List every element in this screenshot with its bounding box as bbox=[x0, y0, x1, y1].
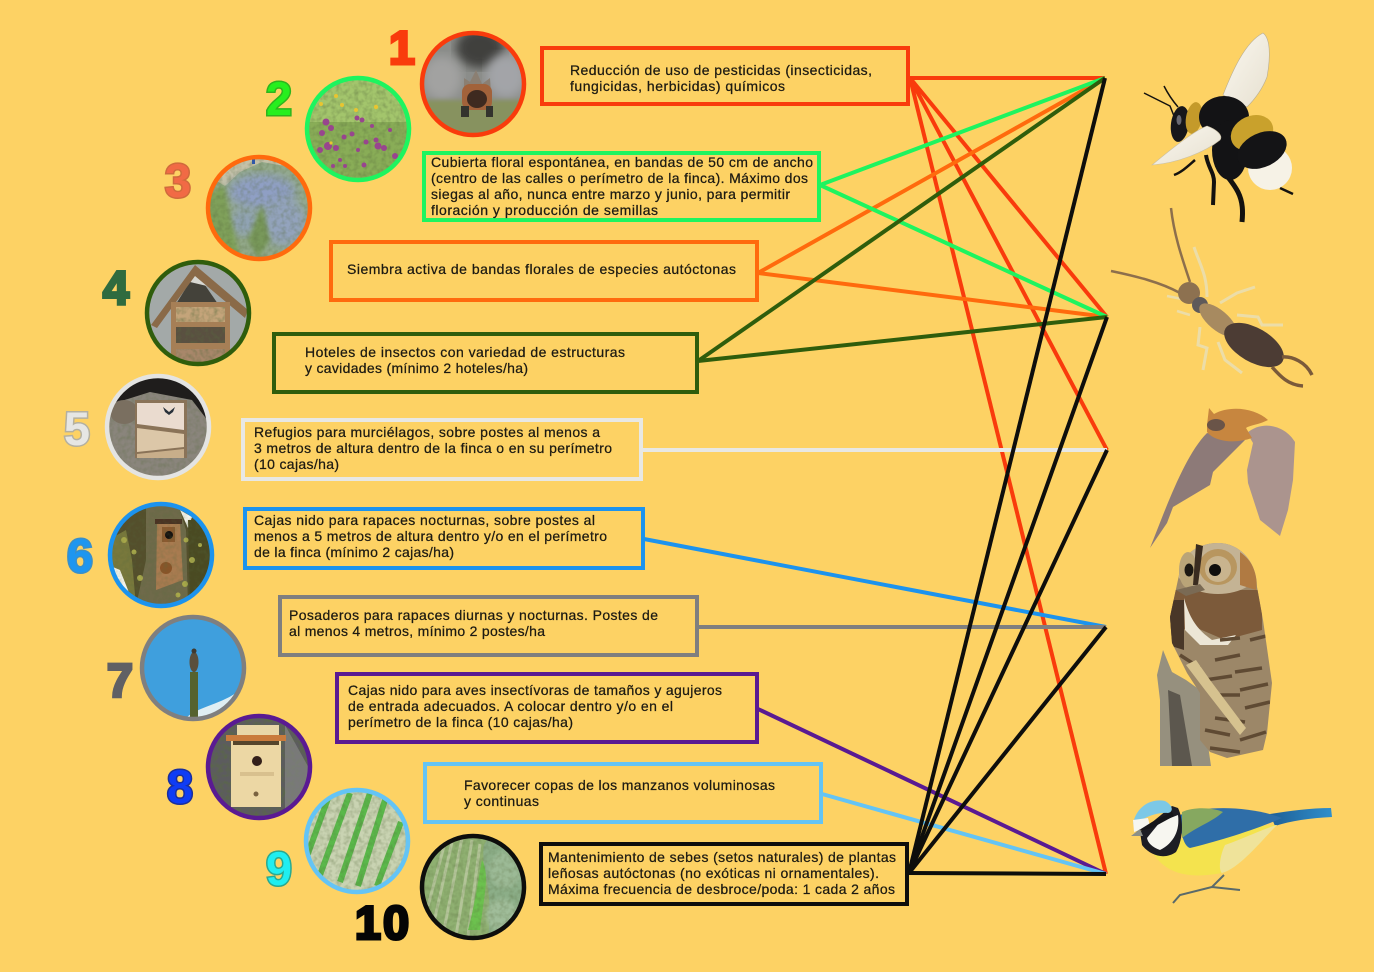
number 1: 1 bbox=[389, 21, 415, 74]
number 3: 3 bbox=[165, 154, 191, 207]
measure 2 text box: floración y producción de semillas bbox=[431, 202, 658, 218]
connectors: measure 2 bbox=[820, 78, 1107, 317]
number 10: 10 bbox=[355, 896, 411, 949]
measure 6 text box bbox=[245, 509, 643, 568]
connector: measure 9 bbox=[822, 794, 1106, 874]
measure 10: photo of hedges bbox=[420, 834, 526, 940]
measure 4 text box bbox=[274, 334, 697, 392]
number 6: 6 bbox=[67, 529, 93, 582]
measure 6: photo of owl nest box bbox=[108, 502, 214, 608]
measure 5 text box: Refugios para murciélagos, sobre postes al menos a bbox=[254, 424, 600, 440]
ring 5 bbox=[107, 376, 209, 478]
measure 2: photo of flower cover bbox=[305, 76, 411, 182]
measure 5 text box: 3 metros de altura dentro de la finca o en su perímetro bbox=[254, 440, 612, 456]
measure 7 text box: al menos 4 metros, mínimo 2 postes/ha bbox=[289, 623, 545, 639]
ring 2 bbox=[307, 78, 409, 180]
connector: measure 7 bbox=[698, 625, 1106, 629]
ring 8 bbox=[208, 716, 310, 818]
number 5: 5 bbox=[64, 402, 90, 455]
measure 4 text box: y cavidades (mínimo 2 hoteles/ha) bbox=[305, 360, 528, 376]
ring 3 bbox=[208, 157, 310, 259]
measure 10 text box: Máxima frecuencia de desbroce/poda: 1 cada 2 años bbox=[548, 881, 895, 897]
ring 6 bbox=[110, 504, 212, 606]
measure 8: photo of bird nest box bbox=[206, 714, 312, 820]
ring 4 bbox=[147, 262, 249, 364]
measure 9 text box: y continuas bbox=[464, 793, 539, 809]
measure 7 text box: Posaderos para rapaces diurnas y nocturnas. Postes de bbox=[289, 607, 658, 623]
measure 5: photo of bat box bbox=[105, 374, 211, 480]
connectors: measure 1 bbox=[910, 78, 1107, 874]
measure 6 text box: de la finca (mínimo 2 cajas/ha) bbox=[254, 544, 454, 560]
measure 1: photo of sprayer bbox=[420, 28, 526, 138]
measure 1 text box bbox=[542, 48, 908, 104]
illustration: tawny owl bbox=[1157, 540, 1277, 766]
ring 10 bbox=[422, 836, 524, 938]
measure 3: photo of flower strip bbox=[206, 155, 312, 261]
connector: measure 6 bbox=[644, 539, 1106, 627]
connector: measure 8 bbox=[758, 709, 1106, 874]
measure 4 text box: Hoteles de insectos con variedad de estructuras bbox=[305, 344, 625, 360]
connectors: measure 3 bbox=[758, 78, 1107, 317]
illustration: earwig bbox=[1111, 208, 1312, 386]
measure 1 text box: fungicidas, herbicidas) químicos bbox=[570, 78, 785, 94]
connectors: measure 4 bbox=[698, 78, 1107, 361]
measure 1 text box: Reducción de uso de pesticidas (insecticidas, bbox=[570, 62, 872, 78]
measure 3 text box bbox=[331, 242, 757, 300]
measure 9 text box bbox=[425, 764, 821, 822]
measure 10 text box: Mantenimiento de sebes (setos naturales) de plantas bbox=[548, 849, 896, 865]
ring 9 bbox=[306, 790, 408, 892]
number 9: 9 bbox=[266, 842, 292, 895]
measure 2 text box: Cubierta floral espontánea, en bandas de 50 cm de ancho bbox=[431, 154, 813, 170]
measure 8 text box bbox=[337, 674, 757, 742]
measure 4: photo of insect hotel bbox=[146, 260, 252, 366]
measure 2 text box: siegas al año, nunca entre marzo y junio, para permitir bbox=[431, 186, 790, 202]
connector lines bbox=[642, 78, 1107, 874]
measure 6 text box: Cajas nido para rapaces nocturnas, sobre postes al bbox=[254, 512, 595, 528]
connector: measure 5 bbox=[642, 448, 1107, 452]
measure 10 text box bbox=[541, 844, 907, 904]
measure 10 text box: leñosas autóctonas (no exóticas ni ornamentales). bbox=[548, 865, 879, 881]
ring 7 bbox=[142, 617, 244, 719]
illustration: bumblebee bbox=[1144, 33, 1293, 222]
measure 6 text box: menos a 5 metros de altura dentro y/o en el perímetro bbox=[254, 528, 607, 544]
number 4: 4 bbox=[103, 261, 129, 314]
number 2: 2 bbox=[266, 72, 292, 125]
measure 8 text box: Cajas nido para aves insectívoras de tamaños y agujeros bbox=[348, 682, 722, 698]
measure 3 text box: Siembra activa de bandas florales de especies autóctonas bbox=[347, 261, 736, 277]
number 8: 8 bbox=[167, 760, 193, 813]
measure 2 text box bbox=[424, 153, 819, 220]
ring 1 bbox=[422, 33, 524, 135]
connectors: measure 10 bbox=[909, 78, 1107, 874]
illustration: bat bbox=[1150, 408, 1295, 548]
measure 9: photo of apple canopies bbox=[302, 788, 410, 894]
measure 5 text box: (10 cajas/ha) bbox=[254, 456, 339, 472]
number 7: 7 bbox=[107, 654, 133, 707]
measure 7: photo of perch post bbox=[140, 615, 246, 722]
measure 8 text box: perímetro de la finca (10 cajas/ha) bbox=[348, 714, 573, 730]
measure 9 text box: Favorecer copas de los manzanos voluminosas bbox=[464, 777, 775, 793]
measure 5 text box bbox=[243, 420, 641, 479]
illustration: blue tit bbox=[1131, 800, 1332, 903]
measure 7 text box bbox=[280, 597, 697, 655]
measure 8 text box: de entrada adecuados. A colocar dentro y/o en el bbox=[348, 698, 673, 714]
measure 2 text box: (centro de las calles o perímetro de la finca). Máximo dos bbox=[431, 170, 808, 186]
